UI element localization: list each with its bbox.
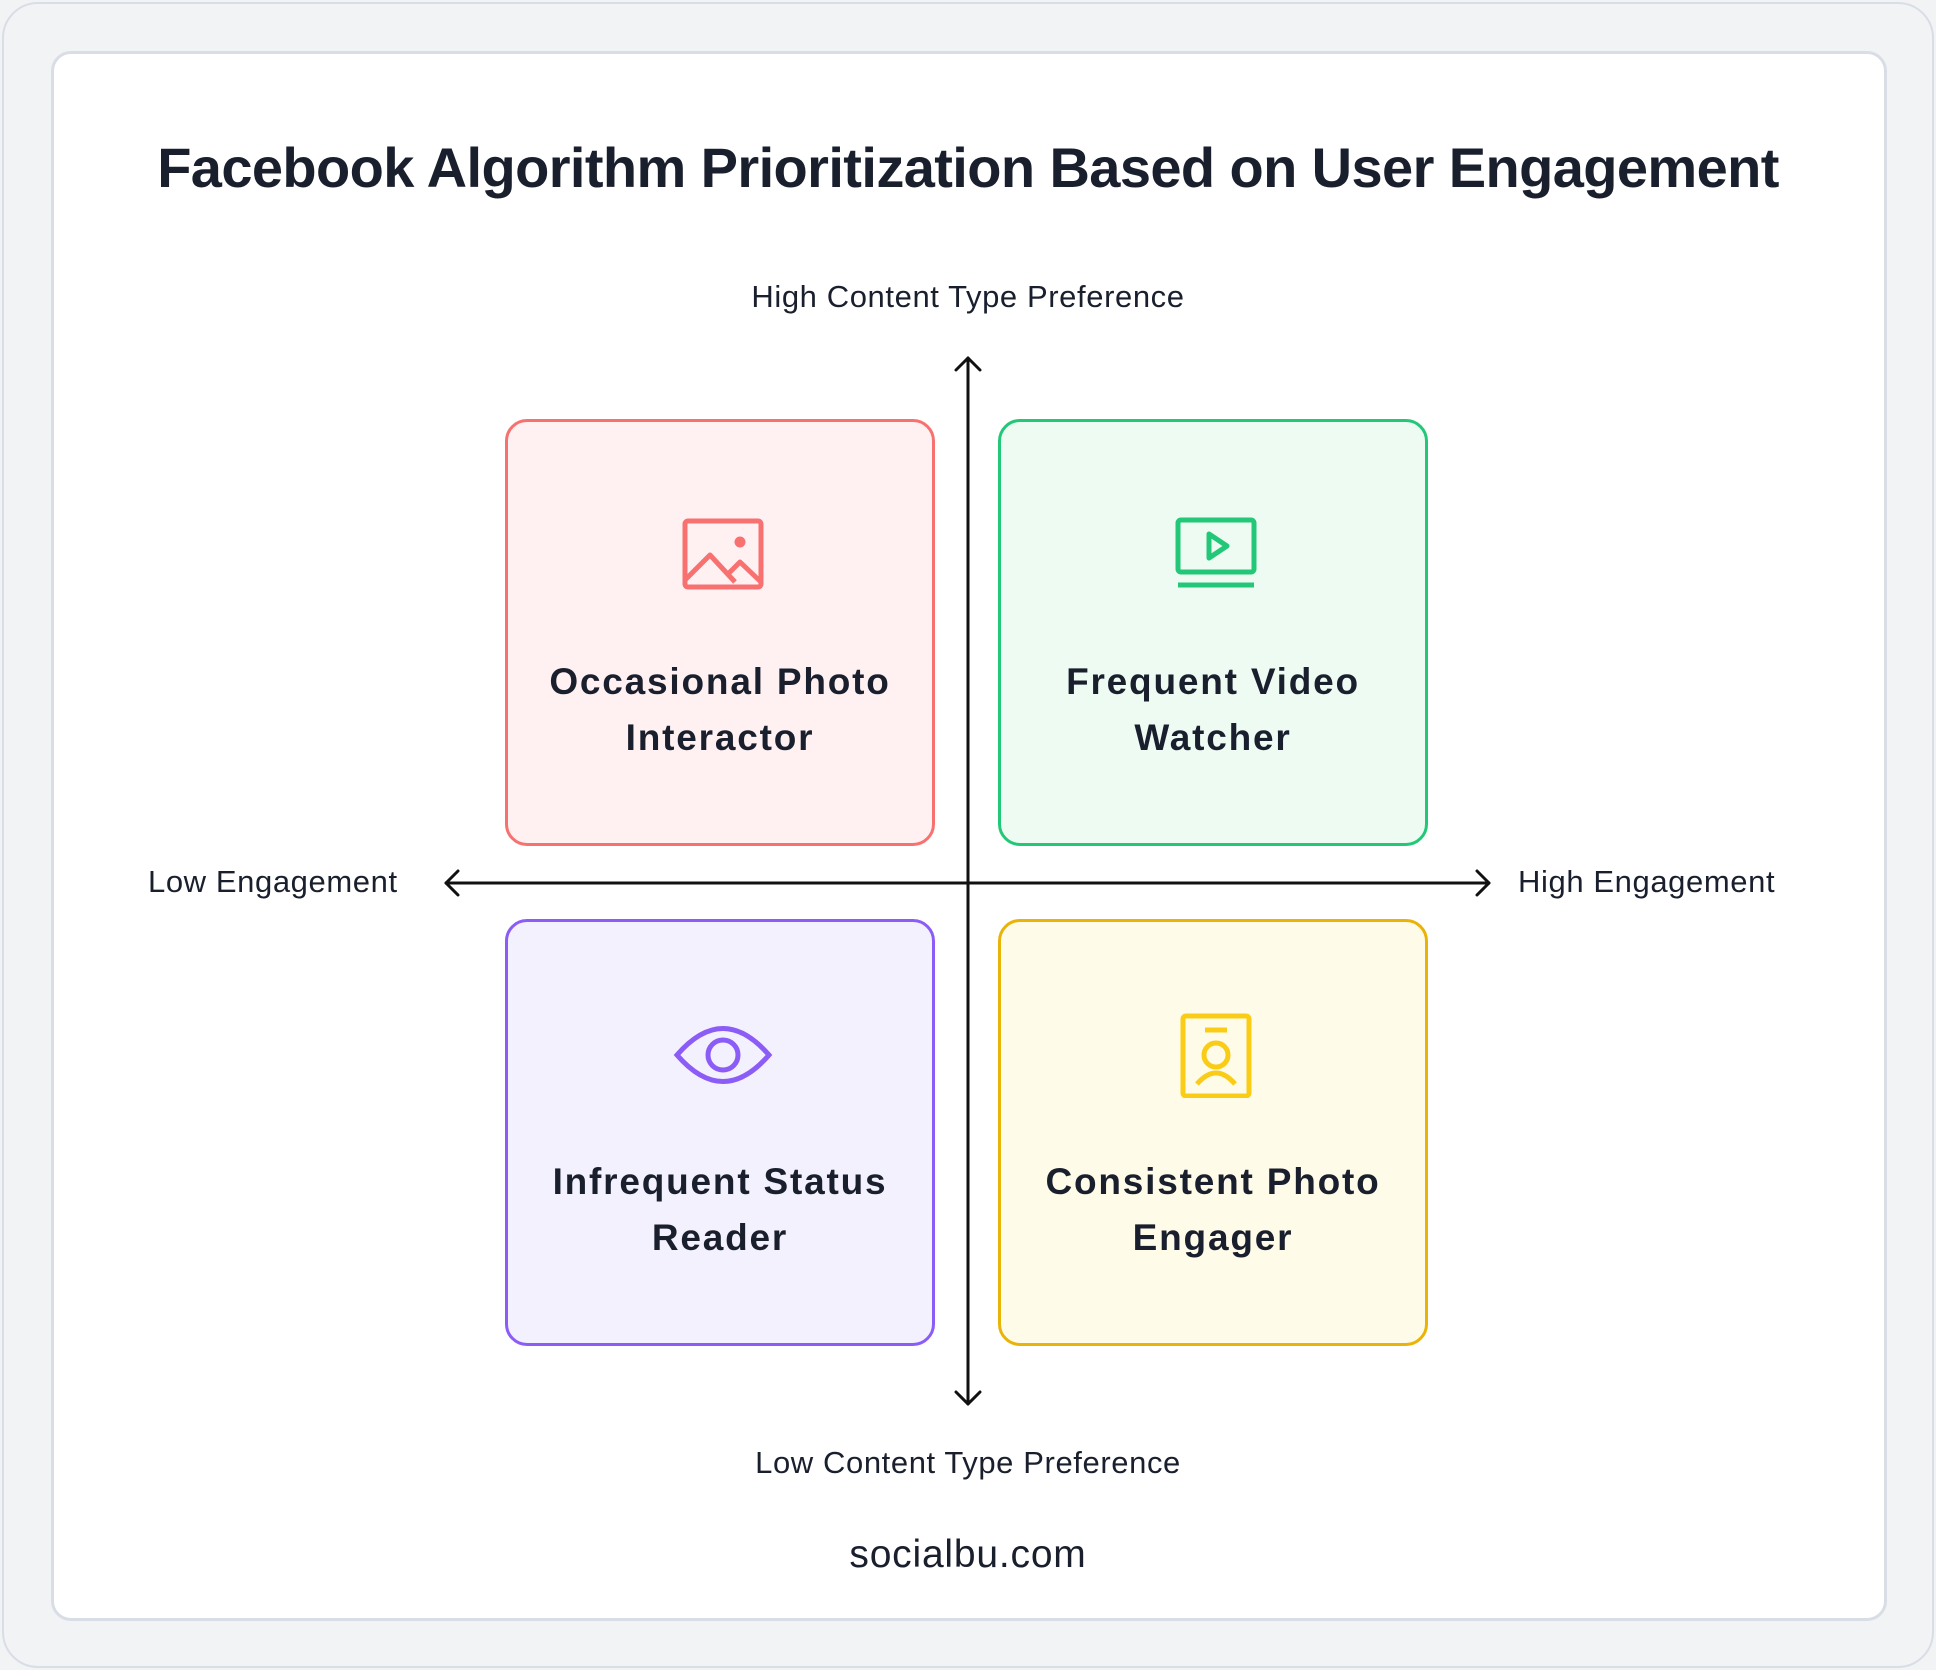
axis label: low content: Low Content Type Preference <box>755 1445 1181 1480</box>
axis label: high engagement: High Engagement <box>1518 864 1775 899</box>
panel: frequent video watcher <box>998 419 1428 846</box>
title: Facebook Algorithm Prioritization Based on User Engagement <box>157 136 1779 199</box>
icon: video <box>1176 518 1256 588</box>
panel: consistent photo engager: Consistent Photo <box>1045 1161 1381 1202</box>
icon: image <box>682 518 764 590</box>
icon: badge <box>1180 1014 1252 1098</box>
icon: eye <box>674 1026 772 1084</box>
panel: occasional photo interactor: Occasional Photo <box>549 661 891 702</box>
axis label: high content: High Content Type Preference <box>751 279 1185 314</box>
panel: occasional photo interactor: Interactor <box>626 717 814 758</box>
axis label: low engagement: Low Engagement <box>148 864 398 899</box>
panel: occasional photo interactor <box>505 419 935 846</box>
panel: infrequent status reader: Reader <box>652 1217 788 1258</box>
panel: frequent video watcher: Frequent Video <box>1066 661 1360 702</box>
panel: consistent photo engager <box>998 919 1428 1346</box>
panel: infrequent status reader: Infrequent Status <box>553 1161 887 1202</box>
footer: socialbu.com <box>849 1533 1087 1576</box>
panel: frequent video watcher: Watcher <box>1134 717 1292 758</box>
panel: consistent photo engager: Engager <box>1133 1217 1293 1258</box>
panel: infrequent status reader <box>505 919 935 1346</box>
